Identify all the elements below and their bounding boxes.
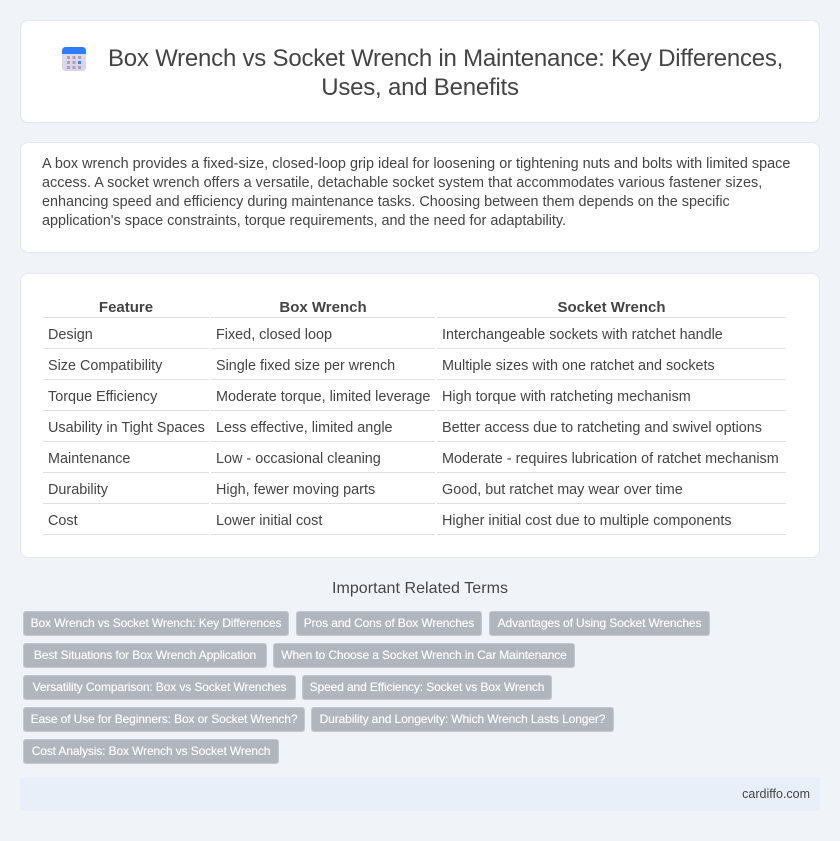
tag xyxy=(311,707,614,732)
row: Durability: High, fewer moving parts xyxy=(216,482,375,498)
icon: calendar xyxy=(62,47,86,71)
row: Size Compatibility xyxy=(48,358,715,374)
tag xyxy=(23,739,279,764)
comparison table xyxy=(43,299,786,535)
related term tags xyxy=(23,611,710,764)
row: Torque Efficiency: Moderate torque, limited leverage xyxy=(216,389,430,405)
row: Cost: Cost xyxy=(48,513,78,529)
row: Durability xyxy=(48,482,683,498)
footer xyxy=(20,777,820,811)
row: Maintenance xyxy=(48,451,779,467)
row: Torque Efficiency: Torque Efficiency xyxy=(48,389,157,405)
table header xyxy=(99,299,666,316)
tag: Best Situations for Box Wrench Application xyxy=(34,648,256,662)
tag xyxy=(273,643,575,668)
row: Maintenance: Low - occasional cleaning xyxy=(216,451,381,467)
table header: Feature xyxy=(99,299,153,316)
row: Design: Design xyxy=(48,327,93,343)
row: Durability: Good, but ratchet may wear over time xyxy=(442,482,683,498)
row: Maintenance: Maintenance xyxy=(48,451,130,467)
heading: Uses, and Benefits xyxy=(321,74,519,101)
row: Cost xyxy=(48,513,732,529)
text block: line 4: application's space constraints, torque requirements, and the need for adaptability. xyxy=(42,213,566,229)
tag xyxy=(23,707,305,732)
text block: line 3: enhancing speed and efficiency during maintenance tasks. Choosing between them depends on the specific xyxy=(42,194,730,210)
tag xyxy=(302,675,552,700)
tag xyxy=(23,611,289,636)
row: Size Compatibility: Size Compatibility xyxy=(48,358,162,374)
tag xyxy=(296,611,482,636)
row: Maintenance: Moderate - requires lubrication of ratchet mechanism xyxy=(442,451,779,467)
tag xyxy=(23,675,296,700)
row: Design xyxy=(48,327,723,343)
tag xyxy=(489,611,710,636)
text block: line 1: A box wrench provides a fixed-size, closed-loop grip ideal for loosening or tightening nuts and bolts with limited space xyxy=(42,156,790,172)
tag: Pros and Cons of Box Wrenches xyxy=(304,616,474,630)
tag: Ease of Use for Beginners: Box or Socket Wrench? xyxy=(31,712,297,726)
row: Cost: Lower initial cost xyxy=(216,513,322,529)
row: Durability: Durability xyxy=(48,482,108,498)
tag: Cost Analysis: Box Wrench vs Socket Wrench xyxy=(32,744,270,758)
row: Design: Interchangeable sockets with ratchet handle xyxy=(442,327,723,343)
tag: Durability and Longevity: Which Wrench Lasts Longer? xyxy=(320,712,605,726)
tag: Versatility Comparison: Box vs Socket Wrenches xyxy=(33,680,286,694)
footer source text: cardiffo.com xyxy=(742,787,810,801)
tag: Advantages of Using Socket Wrenches xyxy=(498,616,701,630)
table header: Socket Wrench xyxy=(557,299,666,316)
row: Usability in Tight Spaces xyxy=(48,420,762,436)
row: Design: Fixed, closed loop xyxy=(216,327,332,343)
row: Cost: Higher initial cost due to multiple components xyxy=(442,513,732,529)
heading: Box Wrench vs Socket Wrench in Maintenance: Key Differences, xyxy=(108,45,783,72)
row: Torque Efficiency xyxy=(48,389,691,405)
row: Usability in Tight Spaces: Better access due to ratcheting and swivel options xyxy=(442,420,762,436)
row: Torque Efficiency: High torque with ratcheting mechanism xyxy=(442,389,691,405)
panel: title header xyxy=(20,20,820,123)
row: Size Compatibility: Multiple sizes with one ratchet and sockets xyxy=(442,358,715,374)
heading: related terms: Important Related Terms xyxy=(332,580,508,597)
tag xyxy=(23,643,267,668)
tag: Box Wrench vs Socket Wrench: Key Differences xyxy=(31,616,281,630)
heading xyxy=(108,45,783,101)
panel: intro text xyxy=(20,142,820,253)
row: Size Compatibility: Single fixed size per wrench xyxy=(216,358,395,374)
tag: Speed and Efficiency: Socket vs Box Wrench xyxy=(310,680,544,694)
row: Usability in Tight Spaces: Less effective, limited angle xyxy=(216,420,393,436)
row: Usability in Tight Spaces: Usability in Tight Spaces xyxy=(48,420,205,436)
table header: Box Wrench xyxy=(279,299,367,316)
tag: When to Choose a Socket Wrench in Car Maintenance xyxy=(281,648,567,662)
panel: comparison table xyxy=(20,273,820,558)
text block: line 2: access. A socket wrench offers a versatile, detachable socket system that accommodates various fastener sizes, xyxy=(42,175,762,191)
